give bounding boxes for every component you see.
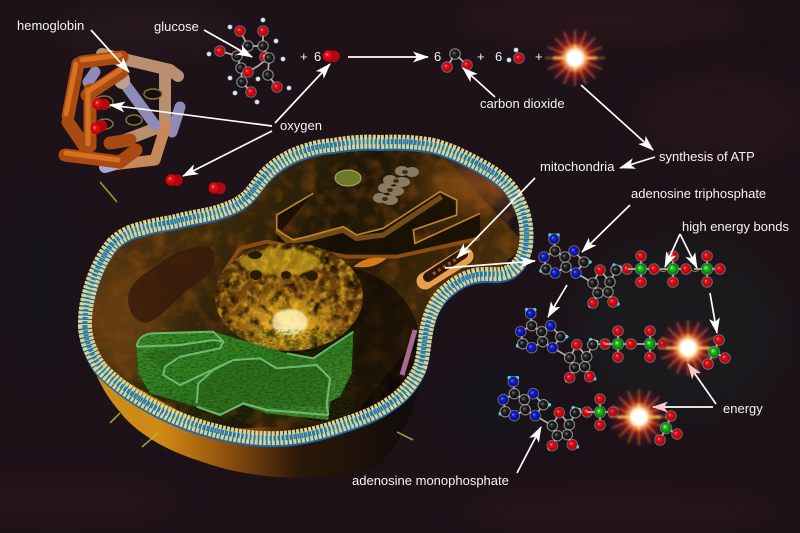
equation: +: [300, 49, 308, 64]
green reticulum: [135, 330, 355, 422]
equation: +: [535, 49, 543, 64]
pale back tubes: [102, 54, 178, 140]
equation: [300, 47, 543, 73]
equation: 6: [495, 49, 502, 64]
labels: energy: [723, 401, 763, 416]
dark shadow under nucleus: [276, 268, 419, 423]
labels: hemoglobin: [17, 18, 84, 33]
equation: 6: [434, 49, 441, 64]
energy star AMP: [606, 384, 672, 450]
labels: synthesis of ATP: [659, 149, 755, 164]
carbon dioxide molecule: [441, 48, 473, 73]
orange tubes: [65, 57, 136, 162]
nucleus: [215, 243, 363, 351]
energy star top: [542, 25, 608, 91]
mitochondrion: [425, 254, 465, 281]
labels: glucose: [154, 19, 199, 34]
pink inner streak: [402, 330, 415, 375]
oxygen molecule equation: [322, 50, 340, 62]
cell: [80, 140, 530, 478]
rough reticulum: [223, 192, 480, 273]
equation: 6: [314, 49, 321, 64]
heme groups: [95, 89, 162, 129]
glucose molecule: [206, 17, 292, 105]
free phosphate AMP: [654, 410, 683, 446]
cell interior: [92, 150, 520, 434]
golgi: [373, 166, 419, 205]
AMP molecule: [498, 376, 683, 452]
labels: mitochondria: [540, 159, 615, 174]
hemoglobin: [65, 54, 180, 167]
equation: +: [477, 49, 485, 64]
labels: carbon dioxide: [480, 96, 565, 111]
small green ticks: [100, 182, 413, 447]
labels: adenosine triphosphate: [631, 186, 766, 201]
oxygen molecules free: [166, 174, 226, 194]
ATP molecule: [538, 233, 726, 309]
labels: oxygen: [280, 118, 322, 133]
oxygen in hemoglobin: [88, 98, 110, 137]
energy star ADP: [655, 315, 721, 381]
free phosphate ADP: [702, 334, 731, 370]
brown lysosome: [128, 247, 215, 323]
labels: high energy bonds: [682, 219, 789, 234]
cell outer bowl: [88, 300, 428, 478]
vacuole: [335, 170, 361, 186]
ADP molecule: [515, 308, 731, 384]
cell membrane: [85, 142, 527, 441]
labels: adenosine monophosphate: [352, 473, 509, 488]
water molecule: [506, 47, 525, 64]
arrows: [91, 30, 717, 473]
